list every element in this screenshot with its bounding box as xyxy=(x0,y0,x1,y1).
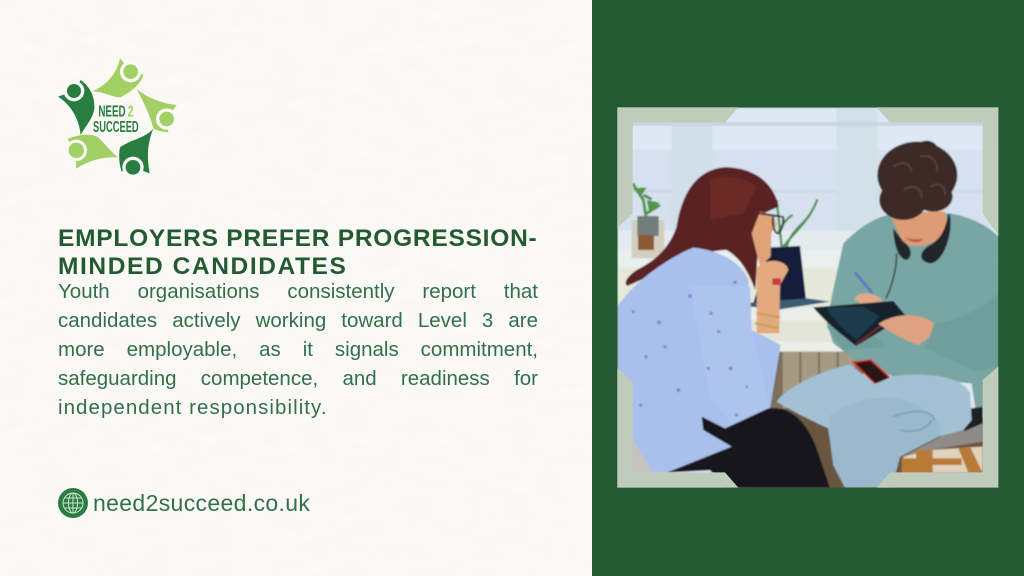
logo wordmark: SUCCEED xyxy=(93,119,139,136)
young man's hand xyxy=(878,315,934,345)
logo figure: left dark green xyxy=(58,80,94,135)
photo: mentor and young person with clipboard, in notched frame xyxy=(617,107,998,488)
woman's hair xyxy=(626,167,779,290)
website url: need2succeed.co.uk xyxy=(93,490,310,516)
stool xyxy=(903,423,983,457)
logo figure: bottom left light green xyxy=(66,135,118,169)
plant behind laptop xyxy=(777,199,817,247)
photo frame with notched corners xyxy=(617,107,998,488)
young man's neck and face xyxy=(889,211,948,246)
logo figure: top light green xyxy=(92,58,143,97)
plant on left xyxy=(633,183,660,217)
radiator xyxy=(757,352,863,408)
heading xyxy=(58,225,537,280)
sill and wall xyxy=(618,251,841,268)
logo wordmark xyxy=(93,103,139,136)
window background xyxy=(617,107,998,488)
logo figure: right light green xyxy=(137,89,177,132)
body text: more employable, as it signals commitment, xyxy=(58,338,538,361)
headphones xyxy=(893,213,951,263)
woman's trousers xyxy=(667,408,830,488)
body text: independent responsibility. xyxy=(58,396,328,419)
body text: safeguarding competence, and readiness for xyxy=(58,367,538,390)
logo wordmark: 2 xyxy=(128,103,134,120)
body text xyxy=(58,280,538,419)
woman's blouse xyxy=(617,248,781,473)
heading: EMPLOYERS PREFER PROGRESSION- xyxy=(58,225,537,252)
logo figure: bottom dark green xyxy=(119,129,153,178)
woman's face and hand xyxy=(752,212,777,267)
clipboard xyxy=(813,301,906,346)
bracelets xyxy=(755,313,780,328)
body text: candidates actively working toward Level 3 are xyxy=(58,309,538,332)
young man's hair xyxy=(877,141,957,220)
logo: Need 2 Succeed xyxy=(58,58,177,175)
logo wordmark: NEED xyxy=(98,103,126,120)
chair behind woman xyxy=(633,440,653,473)
young man's jeans xyxy=(776,364,973,465)
floor shadow xyxy=(750,408,997,488)
body text: Youth organisations consistently report that xyxy=(58,280,538,303)
panel: dark green background xyxy=(592,0,1024,576)
young man's sweatshirt xyxy=(827,213,998,420)
laptop xyxy=(753,246,806,303)
pen xyxy=(855,272,873,293)
heading: MINDED CANDIDATES xyxy=(58,253,347,280)
icon: globe xyxy=(58,488,88,518)
phone xyxy=(853,360,892,384)
glasses xyxy=(759,213,783,233)
